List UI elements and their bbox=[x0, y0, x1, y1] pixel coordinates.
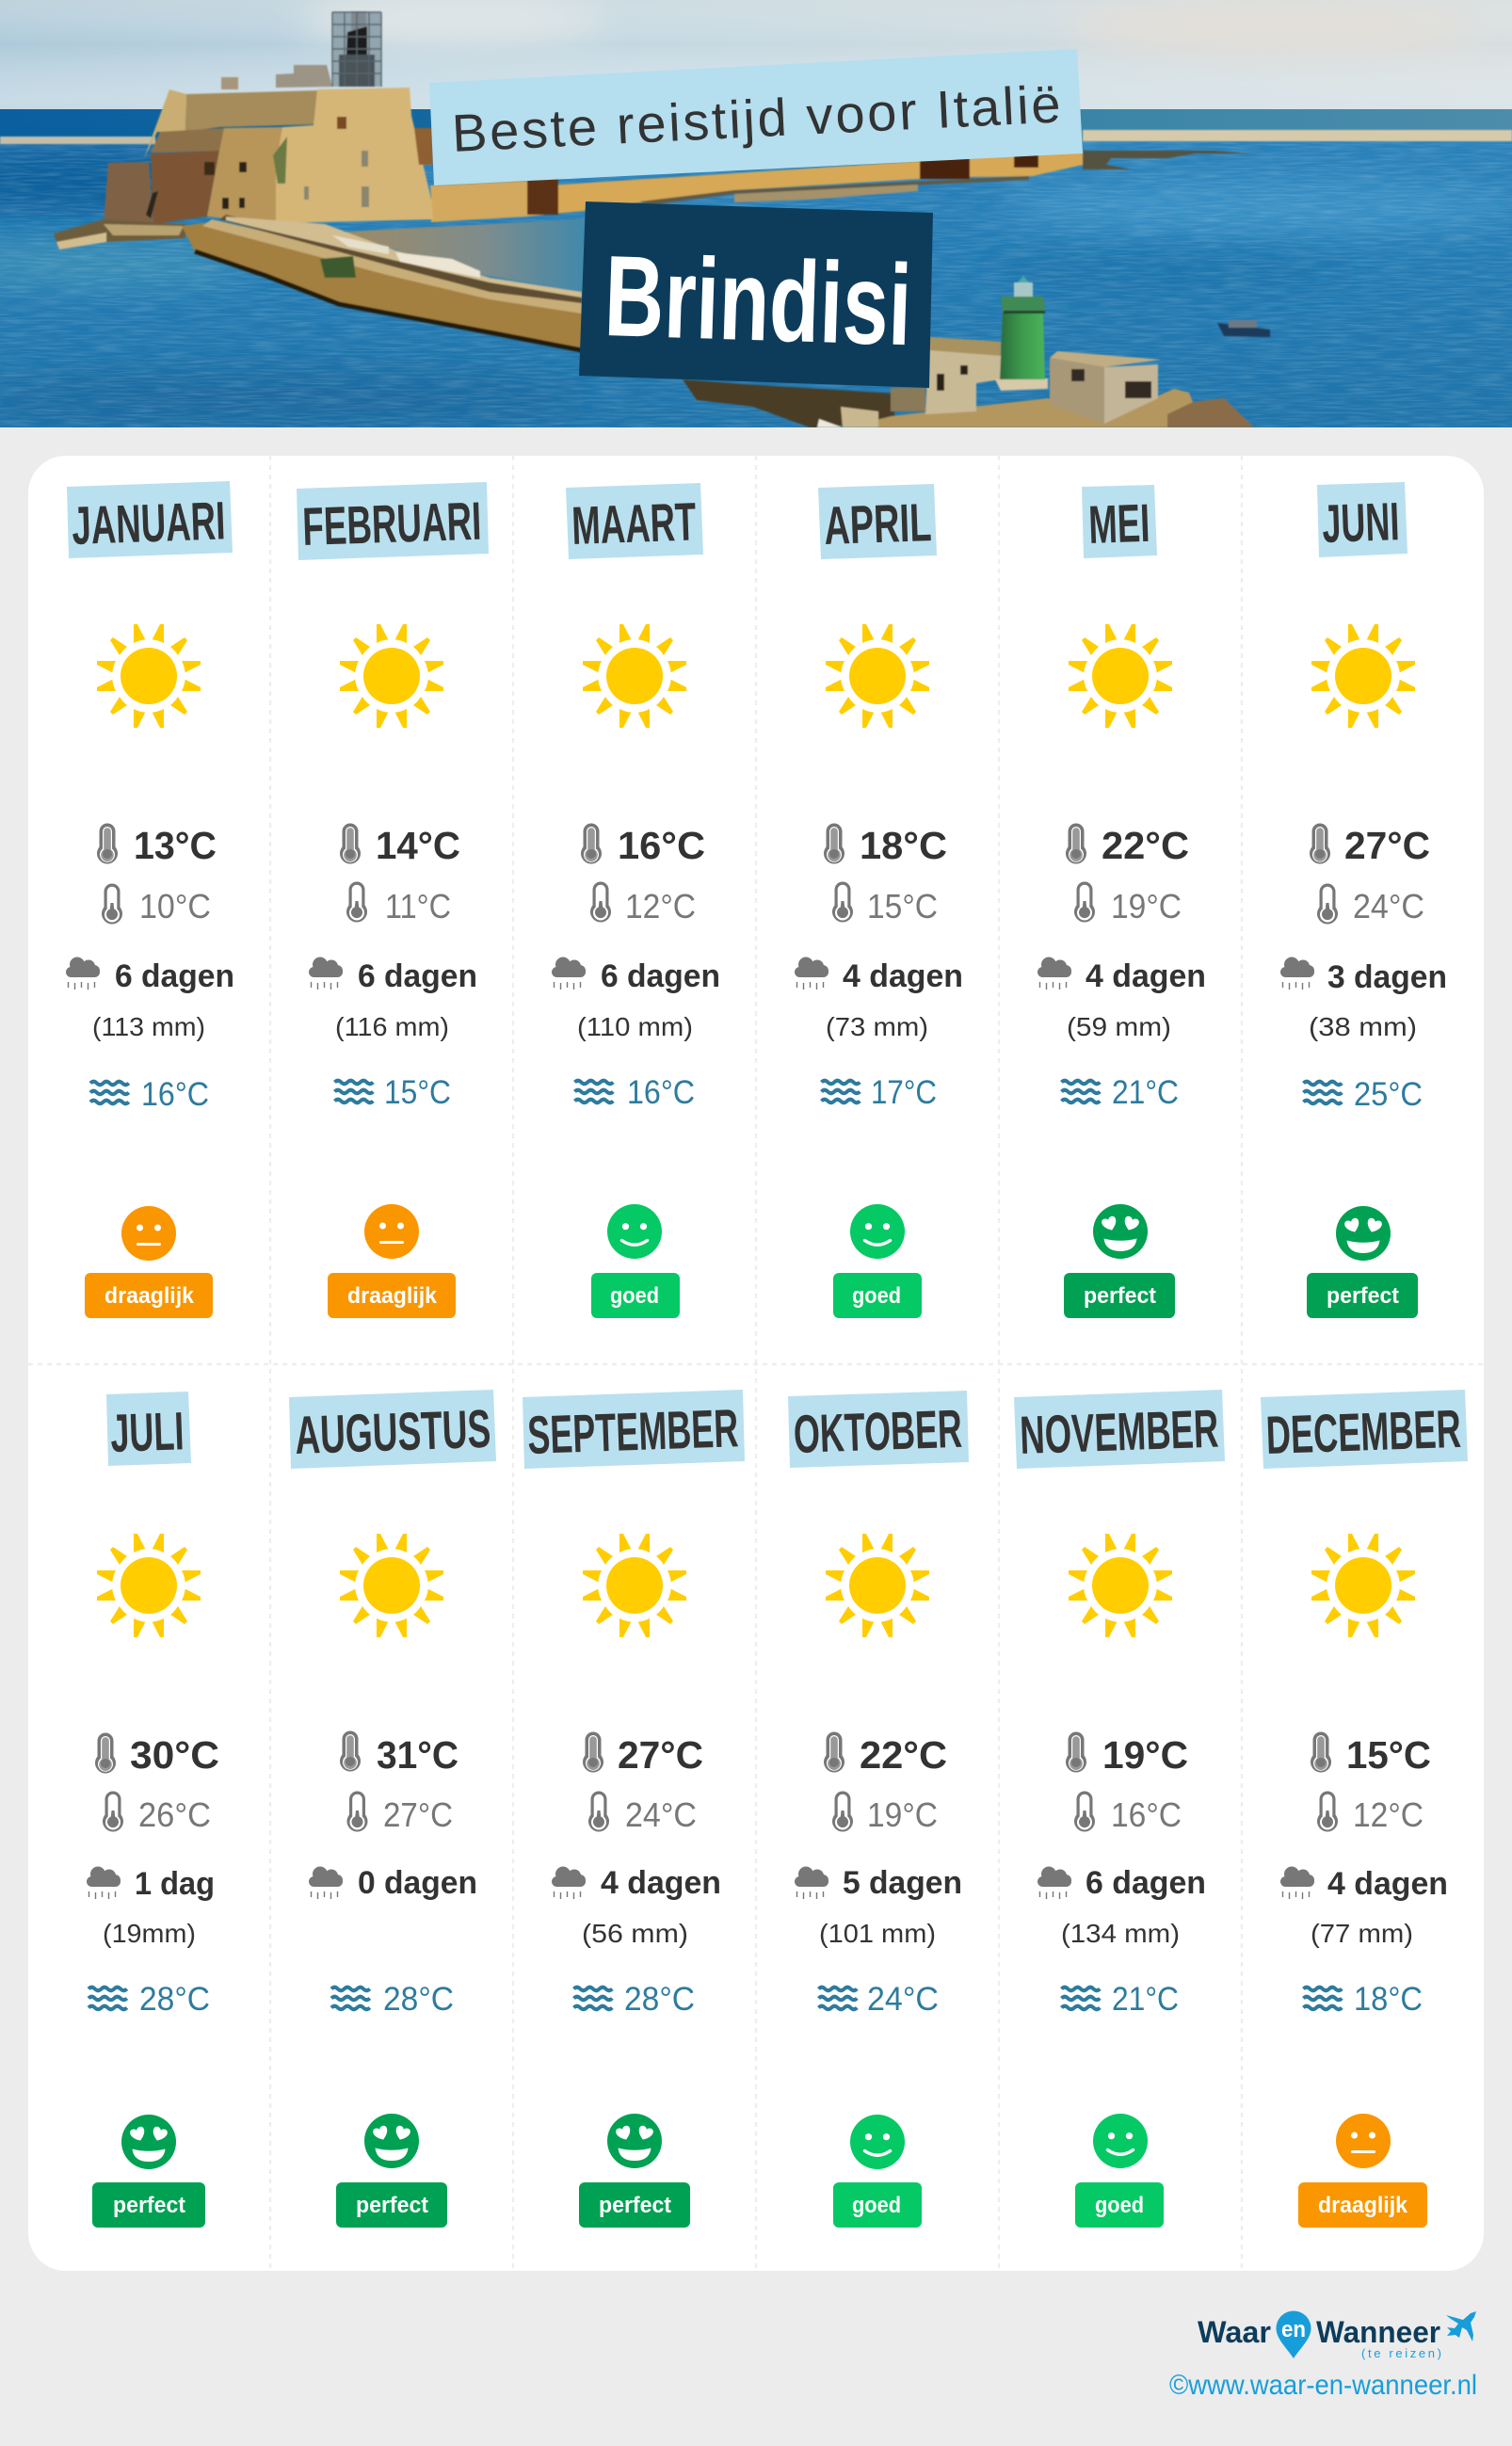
panel: augustus bbox=[289, 1390, 496, 2228]
badge: draaglijk bbox=[85, 1273, 213, 1318]
icon: thermometer low bbox=[1074, 1791, 1095, 1831]
high temperature: 15°C bbox=[1346, 1733, 1431, 1777]
sea temperature: 25°C bbox=[1354, 1076, 1423, 1113]
icon: sun bbox=[1069, 1534, 1172, 1637]
icon: sun bbox=[97, 624, 201, 728]
rain days: 4 dagen bbox=[1086, 958, 1206, 994]
rainfall: (134 mm) bbox=[1061, 1919, 1180, 1948]
badge: goed: goed bbox=[1095, 2193, 1144, 2218]
lighthouse base rubble bbox=[683, 379, 894, 427]
icon: thermometer low bbox=[1074, 881, 1095, 922]
month label bbox=[788, 1391, 969, 1468]
low temperature: 15°C bbox=[867, 887, 938, 925]
badge: perfect: perfect bbox=[356, 2193, 428, 2218]
icon: thermometer low bbox=[1317, 883, 1338, 924]
rainfall: (116 mm) bbox=[335, 1012, 449, 1041]
icon: thermometer low bbox=[103, 1791, 123, 1831]
rain days: 3 dagen bbox=[1327, 959, 1447, 995]
icon: waves bbox=[574, 1987, 612, 2009]
badge: draaglijk: draaglijk bbox=[105, 1283, 195, 1309]
right lighthouse building bbox=[1050, 358, 1104, 424]
icon: sun bbox=[826, 1534, 929, 1637]
icon: thermometer high bbox=[1310, 823, 1330, 863]
rain days: 4 dagen bbox=[601, 1865, 721, 1901]
far wall bbox=[431, 151, 1083, 222]
icon: waves bbox=[821, 1081, 860, 1102]
sea temperature: 16°C bbox=[627, 1074, 695, 1111]
icon: sun bbox=[583, 1534, 686, 1637]
panel: november bbox=[1014, 1390, 1225, 2228]
icon: rain cloud bbox=[87, 1866, 121, 1899]
icon: thermometer high bbox=[97, 823, 118, 863]
icon: waves bbox=[1303, 1987, 1342, 2009]
sea temperature: 28°C bbox=[383, 1981, 454, 2018]
high temperature: 14°C bbox=[376, 824, 460, 867]
month label: OKTOBER bbox=[793, 1399, 963, 1465]
icon: waves bbox=[335, 1081, 373, 1102]
panel: mei bbox=[1037, 485, 1206, 1318]
icon: rain cloud bbox=[1037, 1866, 1071, 1899]
rainfall: (101 mm) bbox=[819, 1919, 936, 1948]
rainfall: (73 mm) bbox=[826, 1012, 928, 1041]
icon: waves bbox=[331, 1987, 370, 2009]
icon: sun bbox=[826, 624, 929, 728]
icon: thermometer high bbox=[1066, 823, 1086, 863]
high temperature: 22°C bbox=[1102, 824, 1189, 867]
icon: thermometer low bbox=[346, 881, 367, 922]
sea temperature: 28°C bbox=[139, 1981, 210, 2018]
icon: neutral face bbox=[1336, 2114, 1391, 2168]
panel: december bbox=[1261, 1390, 1468, 2228]
icon: waves bbox=[574, 1081, 613, 1102]
month label: APRIL bbox=[823, 492, 932, 556]
panel: white calendar card bbox=[28, 456, 1484, 2271]
banner: Beste reistijd voor Italië bbox=[429, 49, 1083, 185]
icon: sun bbox=[340, 1534, 443, 1637]
sea temperature: 18°C bbox=[1354, 1981, 1423, 2018]
month label bbox=[1082, 485, 1157, 558]
icon: waves bbox=[1303, 1082, 1342, 1103]
boat bbox=[1217, 323, 1270, 337]
low temperature: 24°C bbox=[625, 1795, 697, 1834]
icon: thermometer low bbox=[832, 1791, 853, 1831]
month label: MEI bbox=[1087, 493, 1150, 555]
icon: rain cloud bbox=[66, 957, 100, 990]
rooftop buildings bbox=[276, 65, 332, 88]
month label bbox=[297, 482, 489, 560]
logo word: Waar: Waar bbox=[1198, 2315, 1271, 2349]
icon: thermometer high bbox=[340, 823, 361, 863]
icon: map pin with en: en bbox=[1281, 2317, 1306, 2342]
sea temperature: 21°C bbox=[1112, 1981, 1179, 2018]
month label bbox=[523, 1390, 745, 1469]
high temperature: 27°C bbox=[1344, 824, 1430, 867]
icon: rain cloud bbox=[552, 957, 586, 990]
badge: perfect bbox=[1064, 1273, 1175, 1318]
icon: rain cloud bbox=[1037, 957, 1071, 990]
icon: waves bbox=[1062, 1081, 1100, 1102]
sea temperature: 28°C bbox=[624, 1981, 695, 2018]
icon: thermometer high bbox=[581, 823, 602, 863]
rain days: 6 dagen bbox=[601, 958, 720, 994]
badge: draaglijk: draaglijk bbox=[347, 1283, 438, 1309]
website url: ©www.waar-en-wanneer.nl bbox=[1169, 2370, 1477, 2401]
icon: thermometer high bbox=[824, 1732, 844, 1772]
badge: perfect bbox=[92, 2182, 205, 2228]
badge: goed bbox=[591, 1273, 680, 1318]
icon: thermometer low bbox=[1317, 1791, 1338, 1831]
banner: Beste reistijd voor Italië: Beste reistijd voor Italië bbox=[451, 73, 1062, 163]
icon: waves bbox=[819, 1987, 857, 2009]
mole bbox=[182, 221, 582, 350]
month label bbox=[1317, 482, 1407, 557]
badge: goed bbox=[833, 1273, 922, 1318]
badge: perfect bbox=[579, 2182, 690, 2228]
icon: rain cloud bbox=[795, 957, 828, 990]
rain days: 6 dagen bbox=[1086, 1865, 1206, 1901]
castle bbox=[104, 162, 153, 224]
badge: perfect: perfect bbox=[1327, 1283, 1399, 1309]
badge: draaglijk: draaglijk bbox=[1318, 2193, 1408, 2218]
left jetty bbox=[53, 218, 186, 243]
icon: rain cloud bbox=[309, 957, 343, 990]
icon: neutral face bbox=[364, 1204, 419, 1259]
harbour bbox=[330, 218, 588, 292]
low temperature: 11°C bbox=[385, 887, 451, 925]
high temperature: 31°C bbox=[377, 1733, 458, 1777]
month label: SEPTEMBER bbox=[526, 1398, 739, 1466]
badge: goed: goed bbox=[852, 1283, 901, 1309]
icon: heart-eyes face bbox=[1093, 1204, 1148, 1259]
month label: NOVEMBER bbox=[1019, 1399, 1219, 1466]
icon: rain cloud bbox=[552, 1866, 586, 1899]
icon: waves bbox=[1062, 1987, 1100, 2009]
rain days: 4 dagen bbox=[843, 958, 963, 994]
high temperature: 30°C bbox=[130, 1733, 219, 1777]
low temperature: 27°C bbox=[383, 1795, 453, 1834]
icon: sun bbox=[340, 624, 443, 728]
icon: airplane bbox=[1446, 2311, 1476, 2341]
icon: map pin with en bbox=[1277, 2310, 1311, 2358]
rain days: 1 dag bbox=[135, 1866, 215, 1902]
rainfall: (77 mm) bbox=[1311, 1919, 1413, 1948]
icon: smiling face bbox=[850, 1204, 905, 1259]
low temperature: 26°C bbox=[138, 1795, 211, 1834]
panel: juli bbox=[87, 1392, 219, 2228]
badge: draaglijk bbox=[1298, 2182, 1427, 2228]
rain days: 6 dagen bbox=[358, 958, 477, 994]
rainfall: (110 mm) bbox=[577, 1012, 693, 1041]
banner: Brindisi bbox=[579, 201, 933, 388]
badge: perfect bbox=[336, 2182, 447, 2228]
month label: JUNI bbox=[1321, 491, 1400, 555]
rainfall: (38 mm) bbox=[1309, 1012, 1417, 1041]
high temperature: 27°C bbox=[618, 1733, 703, 1777]
breakwaters bbox=[1083, 130, 1512, 141]
icon: thermometer high bbox=[95, 1732, 116, 1773]
icon: heart-eyes face bbox=[607, 2114, 662, 2168]
month label: JULI bbox=[109, 1401, 185, 1464]
rain days: 0 dagen bbox=[358, 1865, 477, 1901]
high temperature: 16°C bbox=[618, 824, 705, 867]
month label: AUGUSTUS bbox=[294, 1399, 491, 1466]
icon: smiling face bbox=[850, 2115, 905, 2169]
icon: thermometer low bbox=[346, 1791, 367, 1831]
badge: perfect: perfect bbox=[1084, 1283, 1156, 1309]
icon: waves bbox=[90, 1082, 129, 1103]
icon: waves bbox=[88, 1987, 127, 2009]
low temperature: 19°C bbox=[1111, 887, 1182, 925]
icon: rain cloud bbox=[309, 1866, 343, 1899]
sea temperature: 16°C bbox=[141, 1076, 209, 1113]
icon: heart-eyes face bbox=[1336, 1206, 1391, 1261]
icon: thermometer high bbox=[1066, 1732, 1086, 1772]
panel: oktober bbox=[788, 1391, 969, 2228]
rainfall: (59 mm) bbox=[1067, 1012, 1171, 1041]
low temperature: 24°C bbox=[1353, 887, 1424, 925]
logo: Waar en Wanneer bbox=[1198, 2310, 1476, 2360]
low temperature: 12°C bbox=[1353, 1795, 1424, 1834]
sea temperature: 21°C bbox=[1112, 1074, 1179, 1111]
high temperature: 13°C bbox=[134, 824, 217, 867]
rainfall: (56 mm) bbox=[582, 1919, 688, 1948]
month label bbox=[1014, 1390, 1225, 1469]
logo tagline: (te reizen) bbox=[1361, 2346, 1441, 2360]
rain days: 6 dagen bbox=[115, 958, 234, 994]
icon: sun bbox=[1311, 624, 1415, 728]
icon: rain cloud bbox=[1280, 957, 1314, 990]
month label: MAART bbox=[571, 491, 697, 556]
rain days: 5 dagen bbox=[843, 1865, 962, 1901]
month label bbox=[106, 1392, 191, 1466]
icon: sun bbox=[97, 1534, 201, 1637]
icon: thermometer low bbox=[590, 881, 611, 922]
icon: sun bbox=[1311, 1534, 1415, 1637]
lighthouse bbox=[995, 378, 1048, 391]
rainfall: (113 mm) bbox=[92, 1012, 205, 1041]
month label bbox=[289, 1390, 496, 1469]
badge: goed: goed bbox=[610, 1283, 659, 1309]
high temperature: 19°C bbox=[1102, 1733, 1188, 1777]
sea temperature: 17°C bbox=[871, 1074, 937, 1111]
badge: goed: goed bbox=[852, 2193, 901, 2218]
icon: thermometer high bbox=[824, 823, 844, 863]
icon: sun bbox=[1069, 624, 1172, 728]
sea temperature: 24°C bbox=[867, 1981, 939, 2018]
logo word: Wanneer: Wanneer bbox=[1316, 2315, 1440, 2349]
panel: januari bbox=[66, 481, 234, 1318]
badge: goed bbox=[1075, 2182, 1164, 2228]
left lighthouse building bbox=[891, 388, 925, 411]
badge: perfect bbox=[1307, 1273, 1418, 1318]
icon: thermometer low bbox=[832, 881, 853, 922]
icon: heart-eyes face bbox=[364, 2114, 419, 2168]
panel: maart bbox=[552, 483, 720, 1318]
icon: thermometer low bbox=[588, 1791, 609, 1831]
badge: perfect: perfect bbox=[599, 2193, 671, 2218]
panel: september bbox=[523, 1390, 745, 2228]
month label: FEBRUARI bbox=[301, 491, 482, 557]
high temperature: 18°C bbox=[860, 824, 947, 867]
badge: goed bbox=[833, 2182, 922, 2228]
icon: thermometer low bbox=[102, 883, 122, 924]
panel: juni bbox=[1280, 482, 1447, 1318]
icon: thermometer high bbox=[1311, 1732, 1331, 1772]
badge: draaglijk bbox=[328, 1273, 456, 1318]
month label bbox=[67, 481, 233, 558]
month label bbox=[818, 484, 937, 559]
badge: perfect: perfect bbox=[113, 2193, 185, 2218]
rainfall: (19mm) bbox=[103, 1919, 196, 1948]
icon: thermometer high bbox=[340, 1730, 361, 1771]
low temperature: 19°C bbox=[867, 1795, 938, 1834]
photo: Brindisi castle and lighthouse bbox=[0, 0, 1512, 428]
panel: februari bbox=[297, 482, 489, 1318]
icon: heart-eyes face bbox=[121, 2115, 176, 2169]
icon: neutral face bbox=[121, 1206, 176, 1261]
icon: rain cloud bbox=[795, 1866, 828, 1899]
sea temperature: 15°C bbox=[384, 1074, 451, 1111]
low temperature: 16°C bbox=[1111, 1795, 1182, 1834]
icon: rain cloud bbox=[1280, 1866, 1314, 1899]
icon: smiling face bbox=[1093, 2114, 1148, 2168]
low temperature: 12°C bbox=[625, 887, 696, 925]
month label: JANUARI bbox=[71, 491, 226, 556]
month label bbox=[566, 483, 703, 559]
rain days: 4 dagen bbox=[1327, 1866, 1448, 1902]
high temperature: 22°C bbox=[860, 1733, 947, 1777]
icon: thermometer high bbox=[583, 1732, 603, 1772]
icon: smiling face bbox=[607, 1204, 662, 1259]
icon: sun bbox=[583, 624, 686, 728]
scaffold tower bbox=[332, 12, 381, 87]
banner: Brindisi: Brindisi bbox=[603, 232, 913, 369]
panel: april bbox=[795, 484, 963, 1318]
low temperature: 10°C bbox=[139, 887, 211, 925]
